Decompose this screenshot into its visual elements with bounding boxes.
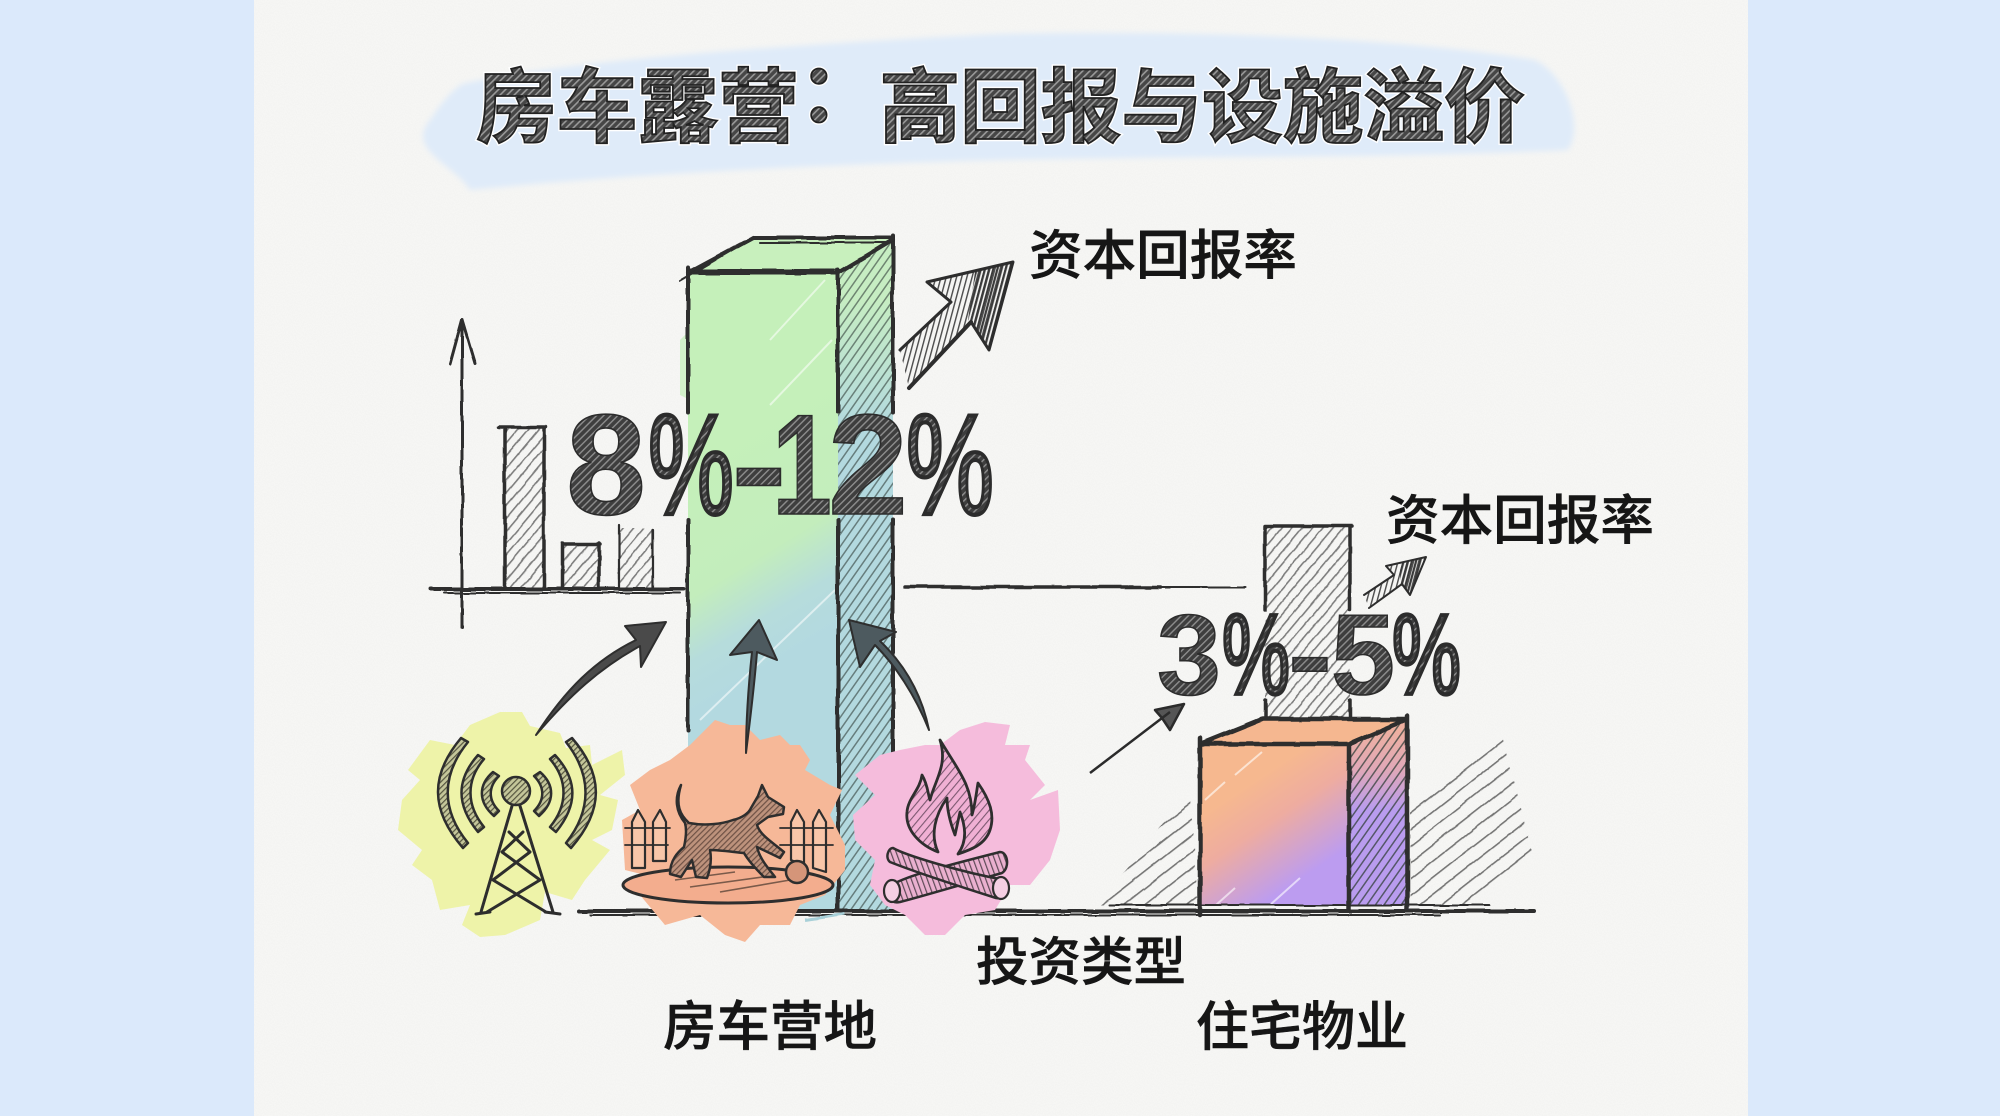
title: 房车露营	[476, 43, 799, 160]
value: 8%-12%: -	[731, 386, 787, 545]
icon: campfire	[853, 722, 1060, 935]
title: 高回报与设施溢价	[879, 43, 1525, 160]
bar: RV campsite	[680, 236, 893, 910]
arrow: campfire to bar	[849, 620, 929, 730]
label: return on capital, campsite: 资本回报率	[1029, 213, 1297, 290]
value: 8%-12%: %	[906, 386, 994, 545]
arrow: small return up	[1364, 557, 1426, 608]
title: 房车露营	[476, 43, 799, 160]
value: 3%-5%: %	[1392, 592, 1461, 719]
value: 3%-5%: 5	[1331, 592, 1395, 719]
icon: dog in fenced yard	[622, 720, 845, 942]
grey bar behind residential	[1265, 526, 1352, 722]
bar: residential property	[1200, 716, 1407, 915]
icon: signal tower	[398, 712, 625, 937]
background hatching beside residential bar	[1098, 730, 1535, 905]
label: return on capital, residential: 资本回报率	[1386, 478, 1654, 555]
arrow: residential up	[1090, 704, 1184, 773]
value: 3%-5%: -	[1288, 592, 1332, 719]
arrow: large return up	[900, 262, 1013, 388]
paper panel	[254, 0, 1748, 1116]
arrow: signal to bar	[536, 622, 666, 735]
baseline	[579, 905, 1534, 920]
title: 高回报与设施溢价	[879, 43, 1525, 160]
value: 8%-12%: %	[648, 386, 734, 545]
label: investment type: 投资类型	[976, 920, 1186, 996]
label: residential property: 住宅物业	[1196, 985, 1408, 1061]
value: 8%-12%: 2	[828, 386, 908, 545]
value: 8%-12%: 8	[566, 386, 646, 545]
value: 3%-5%: %	[1222, 592, 1290, 719]
title: ：	[799, 29, 880, 146]
value: 8%-12%: 1	[772, 386, 832, 545]
background grey mini bar chart	[431, 320, 1245, 627]
title: ：	[799, 29, 880, 146]
label: RV campsite: 房车营地	[663, 984, 877, 1061]
arrow: pets to bar	[730, 620, 777, 753]
title band	[423, 33, 1574, 190]
value: 3%-5%: 3	[1157, 592, 1221, 719]
title	[476, 29, 1525, 160]
